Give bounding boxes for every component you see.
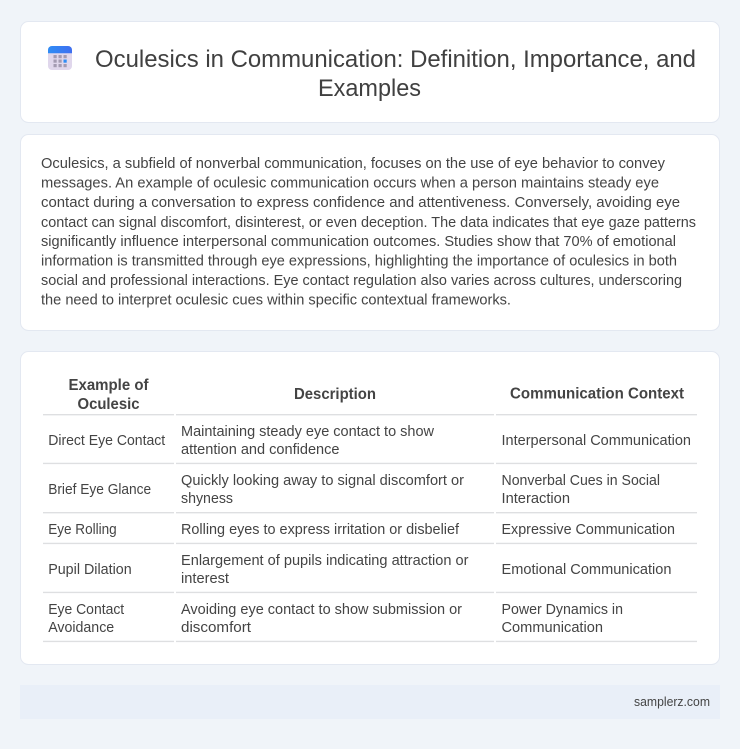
- table row: pupil dilation: interest: [181, 571, 229, 587]
- table row: brief eye glance: Quickly looking away to signal discomfort or: [181, 473, 464, 489]
- table header: Description: [294, 386, 376, 403]
- text block: paragraph: significantly influence interpersonal communication outcomes. Studies show that 70% of emotional: [41, 234, 676, 250]
- text block: paragraph: contact during a conversation to express confidence and attentiveness. Conversely, avoiding eye: [41, 195, 680, 211]
- table row: direct eye contact: attention and confidence: [181, 442, 340, 458]
- title: Examples: [318, 75, 421, 102]
- table row: direct eye contact: Interpersonal Communication: [502, 433, 691, 449]
- table row: direct eye contact: Direct Eye Contact: [48, 433, 165, 449]
- table row: eye contact avoidance: Eye Contact: [48, 602, 124, 618]
- table row: eye contact avoidance: Avoiding eye contact to show submission or: [181, 602, 462, 618]
- table row: eye rolling: Eye Rolling: [48, 522, 117, 538]
- table row: brief eye glance: shyness: [181, 491, 233, 507]
- text block: paragraph: messages. An example of oculesic communication occurs when a person maintains steady eye: [41, 176, 659, 192]
- table row: pupil dilation: [48, 553, 671, 587]
- table row: brief eye glance: [48, 473, 660, 507]
- panel: intro paragraph: [20, 134, 720, 330]
- table row: direct eye contact: [48, 424, 691, 458]
- table row: eye contact avoidance: Power Dynamics in: [502, 602, 623, 618]
- table row: direct eye contact: Maintaining steady eye contact to show: [181, 424, 435, 440]
- footer: samplerz.com: [634, 694, 710, 709]
- table row: eye rolling: Expressive Communication: [502, 522, 675, 538]
- table header: Example of: [68, 377, 149, 394]
- table row: eye contact avoidance: discomfort: [181, 620, 251, 636]
- table row: pupil dilation: Pupil Dilation: [48, 562, 132, 578]
- title: Oculesics in Communication: Definition, Importance, and: [95, 46, 696, 73]
- text block: paragraph: information is transmitted through eye expressions, highlighting the importance of oculesics in both: [41, 253, 677, 269]
- text block: paragraph: Oculesics, a subfield of nonverbal communication, focuses on the use of eye behavior to convey: [41, 156, 666, 172]
- title: [95, 46, 696, 102]
- table row: eye rolling: Rolling eyes to express irritation or disbelief: [181, 522, 460, 538]
- text block: paragraph: the need to interpret oculesic cues within specific contextual frameworks.: [41, 292, 511, 308]
- table row: pupil dilation: Enlargement of pupils indicating attraction or: [181, 553, 469, 569]
- table row: eye contact avoidance: Communication: [502, 620, 603, 636]
- table row: brief eye glance: Brief Eye Glance: [48, 482, 151, 498]
- text block: paragraph: [41, 156, 696, 308]
- text block: paragraph: social and professional interactions. Eye contact regulation also varies across cultures, underscoring: [41, 273, 682, 289]
- panel: title header: [20, 22, 720, 122]
- table header: Communication Context: [510, 386, 685, 402]
- panel: examples table: [20, 352, 720, 664]
- table row dividers: [43, 415, 697, 641]
- icon: calendar: [48, 46, 72, 70]
- table row: pupil dilation: Emotional Communication: [502, 562, 672, 578]
- table row: brief eye glance: Nonverbal Cues in Social: [502, 473, 660, 489]
- table header: [68, 377, 685, 413]
- table header: Oculesic: [78, 396, 140, 413]
- table row: eye rolling: [48, 522, 675, 538]
- table row: eye contact avoidance: Avoidance: [48, 620, 114, 636]
- text block: paragraph: contact can signal discomfort, disinterest, or even deception. The data indicates that eye gaze patterns: [41, 215, 696, 231]
- table row: brief eye glance: Interaction: [502, 491, 570, 507]
- table row: eye contact avoidance: [48, 602, 623, 636]
- footer: [20, 685, 720, 719]
